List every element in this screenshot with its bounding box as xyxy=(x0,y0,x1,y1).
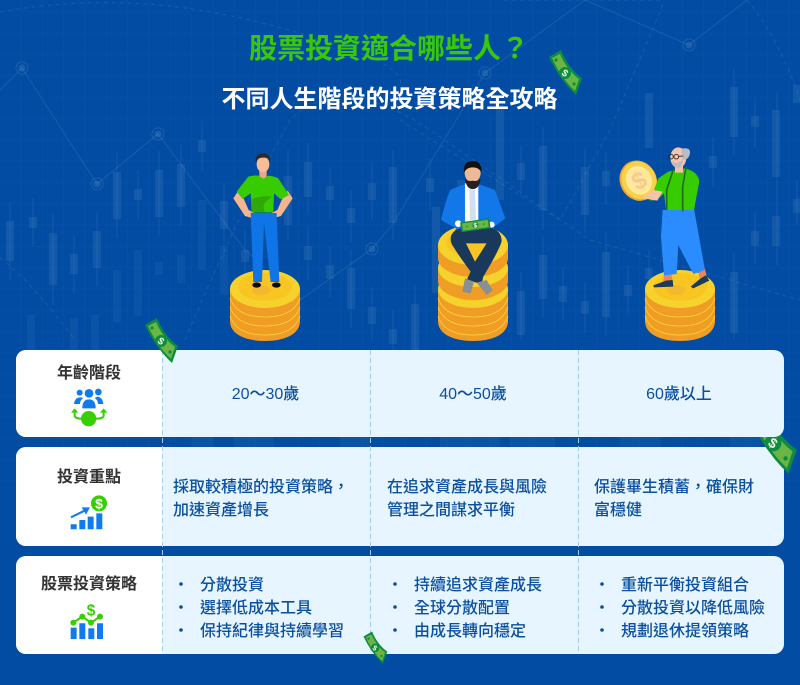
row 3 card: stock strategy: 分散投資以降低風險 xyxy=(621,598,765,617)
row 3 card: stock strategy: 保持紀律與持續學習 xyxy=(200,622,344,640)
person: middle-aged investor xyxy=(441,161,505,295)
coin stack: young investor xyxy=(230,270,300,341)
column dividers xyxy=(162,350,578,654)
row 2 card: investment focus: 管理之間謀求平衡 xyxy=(387,500,515,519)
row 3 card: stock strategy xyxy=(16,556,784,654)
coin stack: senior investor xyxy=(645,270,715,341)
row 3 card: stock strategy: 分散投資 xyxy=(200,575,264,594)
background: grid xyxy=(0,0,800,502)
row 3 card: stock strategy: 股票投資策略 xyxy=(41,574,137,593)
row 1 card: age stage xyxy=(16,350,784,437)
person: senior investor: $ xyxy=(627,166,652,196)
row 2 card: investment focus: 保護畢生積蓄，確保財 xyxy=(594,478,754,496)
subtitle: 不同人生階段的投資策略全攻略 xyxy=(222,85,558,113)
title: 股票投資適合哪些人？ xyxy=(249,33,529,64)
row 3 card: stock strategy: 規劃退休提領策略 xyxy=(621,621,749,640)
row 3 card: stock strategy: 選擇低成本工具 xyxy=(200,599,312,617)
row 2 card: investment focus: 投資重點 xyxy=(57,467,121,486)
coin stack: middle-aged investor xyxy=(438,225,508,341)
row 1 card: age stage: 20～30歲 xyxy=(232,385,299,403)
icon: rising bars with dollar: $ xyxy=(95,495,103,511)
row 3 card: stock strategy: 由成長轉向穩定 xyxy=(414,621,526,640)
person: young investor xyxy=(233,153,293,288)
row 1 card: age stage: 年齡階段 xyxy=(57,363,121,382)
background: trend line xyxy=(0,0,800,340)
row 2 card: investment focus: 富穩健 xyxy=(594,500,642,519)
person: senior investor xyxy=(612,147,709,288)
row 2 card: investment focus: 採取較積極的投資策略， xyxy=(173,477,349,496)
row 1 card: age stage: 40～50歲 xyxy=(439,385,507,403)
person: middle-aged investor: $ xyxy=(473,222,478,230)
row 3 card: stock strategy: 持續追求資產成長 xyxy=(414,575,542,594)
flying banknote: above first row xyxy=(145,318,178,363)
row 2 card: investment focus xyxy=(16,447,784,546)
row 2 card: investment focus: 在追求資產成長與風險 xyxy=(387,477,547,496)
row 2 card: investment focus: 加速資產增長 xyxy=(173,500,269,519)
icon: rising bars with dollar xyxy=(71,495,107,529)
flying banknote: bottom xyxy=(363,631,387,664)
icon: bars with trend and dollar: $ xyxy=(87,602,96,619)
row 1 card: age stage: 60歲以上 xyxy=(646,385,712,403)
flying banknote: right edge xyxy=(751,411,797,474)
background: candlestick chart xyxy=(6,68,800,447)
icon: people group xyxy=(71,389,107,426)
row 3 card: stock strategy: 全球分散配置 xyxy=(414,599,510,617)
icon: bars with trend and dollar xyxy=(70,602,103,639)
flying banknote: top xyxy=(549,50,582,95)
row 3 card: stock strategy: 重新平衡投資組合 xyxy=(621,575,749,594)
